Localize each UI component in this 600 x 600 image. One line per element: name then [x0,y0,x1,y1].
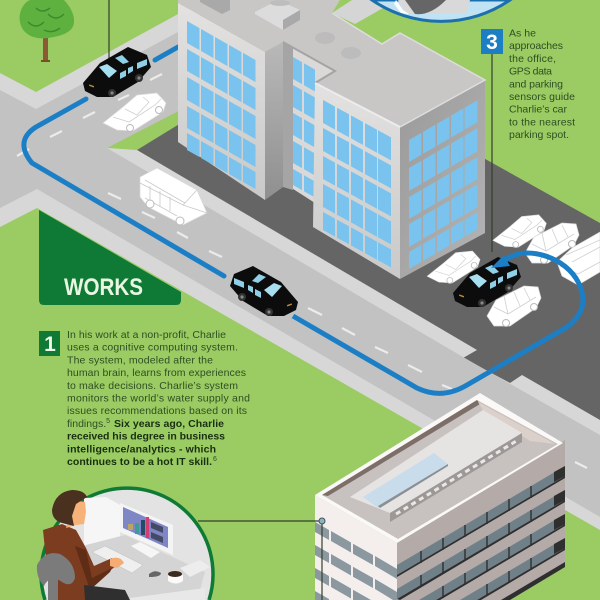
step 3 number: 3 [486,31,498,54]
step 3 text: and parking [509,78,563,90]
step 3 text: to the nearest [509,116,575,128]
parking route arrow [491,253,583,305]
step 1 text: findings. [67,418,106,430]
rooftop units [200,0,361,59]
parked white cars [427,215,600,326]
step 1 number [39,331,60,356]
callout line to car 2 [108,0,110,58]
step 1 text: intelligence/analytics - which [67,443,216,455]
circle: Charlie at desk [41,488,213,600]
step 1 text: human brain, learns from experiences [67,367,246,379]
step 1 text: monitors the world’s water supply and [67,392,250,404]
black car: upper road [83,47,151,97]
tree [20,0,74,62]
building right [283,13,485,279]
parking lot [137,50,600,435]
step 3 text: parking spot. [509,129,569,141]
road lane dashes [17,74,587,468]
step 3 text: Charlie’s car [509,104,568,116]
step 3 text: approaches [509,40,563,52]
step 1 text [67,329,250,468]
black car: lower road [230,266,298,316]
step 1 number: 1 [44,333,56,356]
works banner [39,210,181,305]
step 1 text: The system, modeled after the [67,354,213,366]
step 1 text: issues recommendations based on its [67,405,247,417]
step 3 number [481,29,503,54]
building courtyard notch [332,0,383,24]
step 1 text: In his work at a non-profit, Charlie [67,329,226,341]
step 1 text: uses a cognitive computing system. [67,342,238,354]
route segment upper [155,47,178,60]
step 3 text: the office, [509,53,556,65]
step 1 text: to make decisions. Charlie’s system [67,380,238,392]
route segment left [24,99,224,276]
step 3 text: As he [509,28,536,40]
works banner: WORKS [64,274,143,301]
step 1 text: 6 [213,456,217,463]
step 3 text [509,28,575,141]
callout 3 line [491,54,493,252]
step 1 text: continues to be a hot IT skill. [67,456,212,468]
route segment to parking [293,300,583,393]
callout 1 line [198,521,322,600]
step 3 text: sensors guide [509,91,575,103]
step 3 text: GPS data [509,66,552,78]
callout 1 marker [319,518,325,524]
circle: car interior top [372,0,510,21]
step 1 text: received his degree in business [67,431,225,443]
step 1 text: 5 [106,418,110,425]
lower building [315,393,565,600]
building left [178,0,485,203]
white van [140,168,207,225]
step 1 text: Six years ago, Charlie [114,418,224,430]
white car parked on road [103,93,166,132]
person [37,490,130,600]
black car: parking [453,257,521,307]
